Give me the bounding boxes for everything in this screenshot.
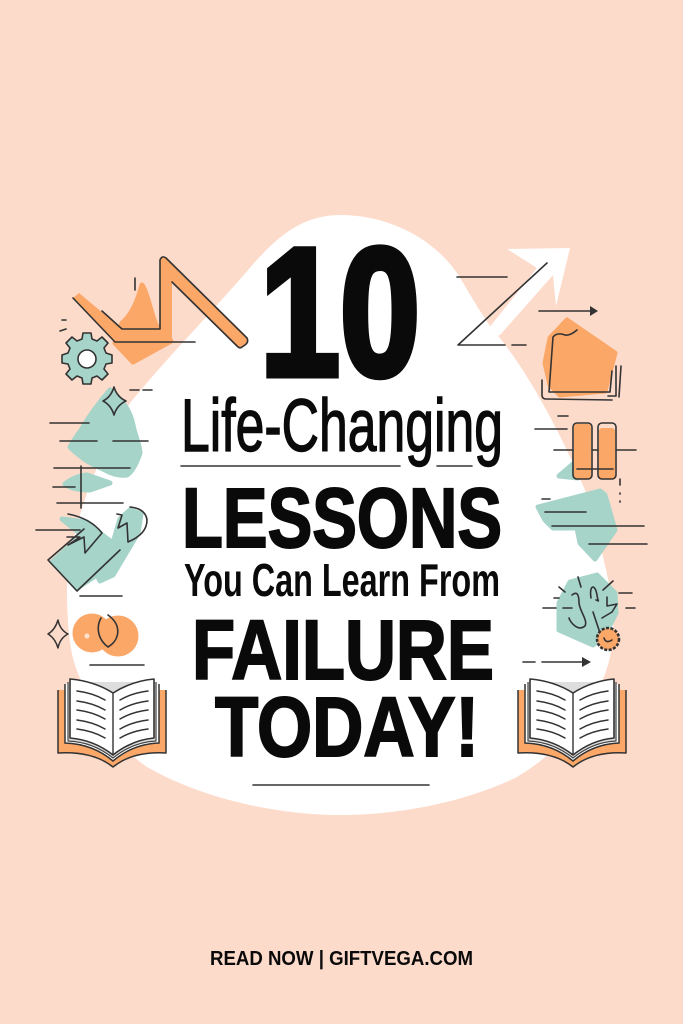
icon: arrow right (523, 657, 591, 667)
divider under title (253, 784, 429, 786)
title: You Can Learn From: You Can Learn From (184, 554, 500, 606)
teal blob with lines (50, 390, 152, 508)
footer call to action: READ NOW | GIFTVEGA.COM (210, 948, 473, 970)
icon: gear (62, 333, 112, 384)
icon: falling zigzag line (60, 257, 248, 362)
icon: two pill bars (535, 416, 636, 502)
title: LESSONS: LESSONS (182, 471, 502, 565)
icon: orange circles with leaf (72, 596, 144, 665)
icon: orange house shape (542, 320, 621, 400)
icon: rising arrow (457, 248, 598, 345)
icon: open book right (518, 679, 626, 767)
title: number 10: 10 (260, 210, 420, 414)
icon: sparkle left (48, 620, 68, 648)
title: TODAY!: TODAY! (215, 680, 479, 774)
white central blob (67, 215, 613, 815)
teal blob right with lines (538, 491, 647, 559)
icon: sparkle teal (103, 387, 126, 415)
icon: teal brain with orange gear (543, 575, 635, 650)
icon: open book left (58, 679, 166, 767)
divider under Life-Changing (181, 465, 472, 467)
icon: broken arrow (36, 507, 147, 591)
title: FAILURE: FAILURE (192, 603, 494, 697)
title: Life-Changing: Life-Changing (181, 384, 503, 467)
